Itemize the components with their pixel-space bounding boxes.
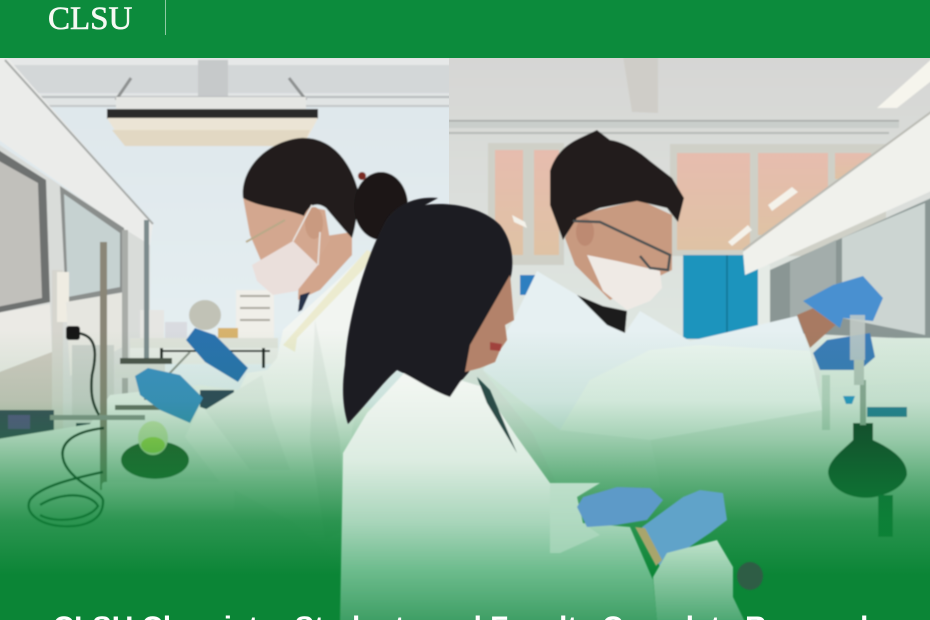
dark flask bbox=[822, 375, 907, 537]
neck and face bbox=[298, 232, 352, 300]
retort stands and balance bbox=[49, 219, 190, 490]
hair bbox=[550, 130, 684, 240]
face bbox=[465, 275, 514, 372]
hair bbox=[243, 138, 358, 238]
green header bar bbox=[0, 0, 930, 58]
gloves bbox=[186, 328, 248, 382]
air conditioner bbox=[107, 60, 318, 146]
gloves bbox=[577, 487, 663, 527]
header divider bbox=[165, 0, 166, 35]
foreground student bbox=[340, 198, 763, 620]
sleeve shading bbox=[550, 483, 600, 553]
male student bbox=[484, 129, 884, 440]
left lab photo bbox=[0, 58, 449, 562]
back student bbox=[134, 137, 409, 432]
right cabinet bbox=[742, 111, 930, 339]
ear bbox=[305, 207, 323, 239]
white lab coat bbox=[340, 370, 657, 620]
gloves bbox=[803, 276, 883, 328]
syringe bbox=[850, 315, 865, 360]
pipette bbox=[168, 352, 190, 375]
lab coat bbox=[198, 268, 365, 432]
bench top bbox=[0, 392, 150, 446]
rotary apparatus bbox=[653, 540, 745, 620]
face bbox=[565, 200, 672, 300]
black shirt bbox=[577, 295, 627, 333]
blue locker bbox=[683, 255, 758, 339]
bench right bbox=[640, 380, 930, 620]
right lab photo bbox=[449, 58, 930, 560]
wrist bbox=[635, 527, 662, 566]
ceiling vent and light bbox=[623, 56, 658, 113]
duct bbox=[449, 122, 899, 128]
arm bbox=[796, 308, 836, 348]
far bench and shelf bbox=[130, 290, 278, 373]
glasses bbox=[573, 221, 670, 270]
logo wordmark: CLSU bbox=[48, 1, 132, 37]
hair bun bbox=[354, 172, 408, 240]
green fade over both photos bbox=[0, 320, 930, 620]
windows bbox=[488, 143, 886, 265]
mask bbox=[587, 255, 662, 310]
collar bbox=[283, 250, 377, 352]
hair bbox=[343, 198, 512, 424]
dark under collar bbox=[298, 292, 310, 312]
ear bbox=[576, 218, 594, 246]
knob bbox=[737, 562, 763, 590]
glasses bbox=[246, 220, 285, 242]
lab coat bbox=[484, 272, 810, 429]
collar bbox=[477, 377, 517, 453]
mask bbox=[252, 241, 318, 295]
power cord and tubing bbox=[29, 333, 104, 526]
wall cabinet and windows on left side bbox=[0, 56, 153, 445]
